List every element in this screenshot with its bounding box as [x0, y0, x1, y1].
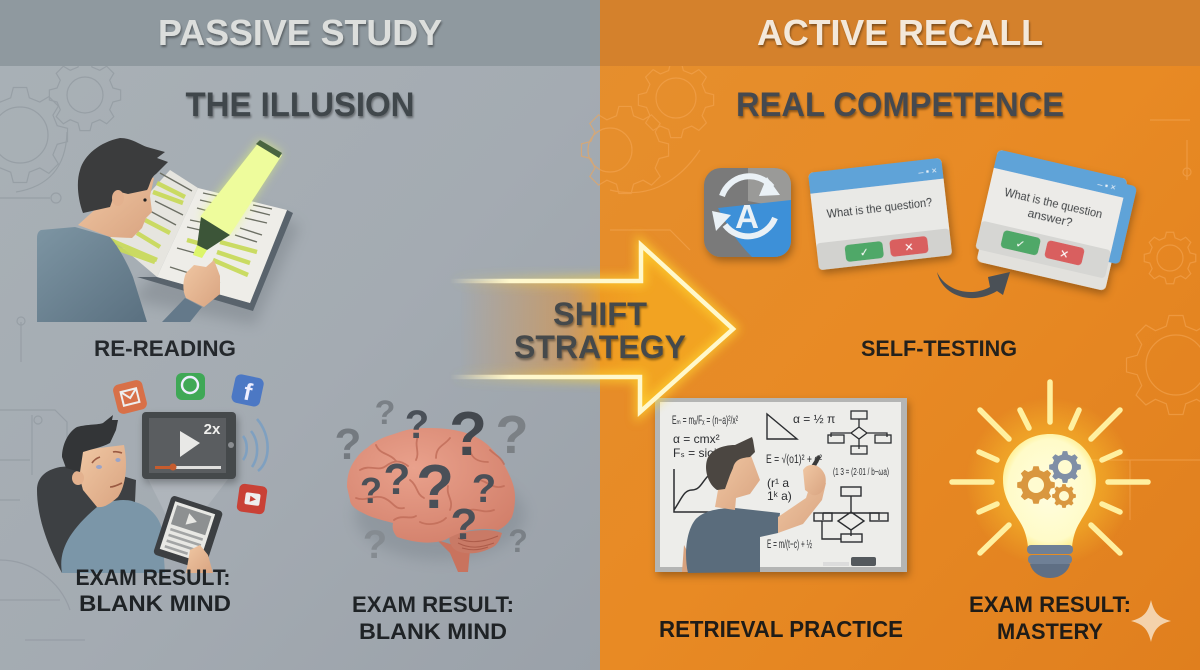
- question marks: ?: [416, 453, 454, 522]
- dialog stack: question answer: answer?: [1026, 206, 1074, 230]
- video tablet: [142, 412, 236, 479]
- e-reader: [153, 495, 223, 571]
- dialog: what is the question: ✕: [904, 241, 914, 254]
- video tablet: 2x: [204, 421, 221, 438]
- flowchart top: [828, 411, 891, 454]
- illustration: distracted student with video and apps: [37, 373, 268, 573]
- dialog stack: question answer: – ▪ ×: [1097, 179, 1117, 193]
- dialog stack: question answer: [972, 149, 1138, 293]
- student hand and marker: [803, 455, 826, 495]
- eraser and marker: [823, 557, 876, 566]
- question marks: ?: [335, 420, 361, 469]
- dialog: what is the question: ✓: [859, 247, 870, 260]
- curved arrow: [937, 272, 1010, 298]
- panel: passive study background: [0, 0, 600, 670]
- sound waves: [243, 419, 268, 471]
- formulas: 1ᵏ a): [767, 489, 792, 503]
- brain folds: [356, 436, 504, 524]
- formulas: E = √(o1)² + o²: [766, 452, 822, 466]
- formulas: Fₛ = sioi²: [673, 446, 720, 460]
- label: exam result blank mind 2: [352, 592, 514, 644]
- flowchart bottom: [814, 487, 888, 542]
- illustration: whiteboard retrieval practice: [655, 398, 907, 573]
- arrow label: SHIFT: [553, 296, 647, 332]
- arrow label: STRATEGY: [514, 329, 686, 365]
- label: exam result mastery: MASTERY: [997, 619, 1103, 644]
- hand: [186, 545, 213, 573]
- highlighter: [193, 140, 282, 258]
- formulas: E = m/(t−c) + ½: [767, 537, 812, 551]
- illustration: student re-reading with highlighter: [37, 138, 300, 325]
- dialog stack: question answer: ✓: [1014, 238, 1026, 252]
- student body: [61, 500, 165, 573]
- book shadow: [130, 200, 300, 325]
- formulas: Eₘ = mₓ/Fₓ = (n−a)²/x²: [672, 413, 738, 427]
- heading: real competence: REAL COMPETENCE: [736, 86, 1064, 124]
- hair: [62, 415, 118, 472]
- question marks: ?: [360, 470, 382, 511]
- bulb glass: [1003, 434, 1096, 547]
- icon: sparkle: [1131, 600, 1171, 642]
- head: [715, 453, 760, 510]
- recall app icon: [704, 168, 791, 257]
- question marks: ?: [384, 455, 410, 504]
- label: exam result mastery: [969, 592, 1131, 644]
- hair: [706, 437, 755, 490]
- illustration: confused brain with question marks: [335, 394, 528, 572]
- hair: [78, 138, 168, 213]
- background pattern: gears and circuits, left: [0, 59, 121, 640]
- light rays: [952, 382, 1148, 553]
- label: re-reading: RE-READING: [94, 336, 236, 361]
- question marks: ?: [472, 467, 496, 511]
- label: retrieval practice: RETRIEVAL PRACTICE: [659, 616, 903, 642]
- app icon: facebook: f: [241, 378, 255, 407]
- question marks: ?: [375, 394, 395, 432]
- label: self-testing: SELF-TESTING: [861, 336, 1017, 361]
- face: [78, 175, 154, 238]
- small graph: [674, 469, 714, 512]
- app icon: gmail: [112, 379, 148, 415]
- label: exam result blank mind 1: [76, 565, 231, 616]
- brain stem: [437, 540, 470, 572]
- label: exam result mastery: EXAM RESULT:: [969, 592, 1131, 617]
- dialog: what is the question: What is the question?: [826, 195, 933, 221]
- whiteboard: [655, 398, 907, 572]
- question marks: ?: [508, 523, 528, 559]
- formulas: α = ½ π: [793, 412, 835, 426]
- gears: [1017, 451, 1081, 508]
- glow: [965, 397, 1135, 567]
- formulas: (1 3 = (2·01 / b−ωa): [833, 467, 889, 478]
- hand: [183, 260, 220, 307]
- bulb base: [1027, 545, 1073, 578]
- head: [79, 445, 126, 507]
- label: exam result blank mind 2: BLANK MIND: [359, 619, 507, 644]
- arrow: shift strategy: [450, 245, 733, 412]
- app icon: youtube: [236, 483, 268, 515]
- background pattern: gears and circuits, right: [581, 62, 1200, 520]
- student body: [686, 508, 780, 573]
- student body: [37, 227, 147, 322]
- student left arm: [682, 545, 698, 572]
- triangle: [767, 414, 797, 439]
- title: passive study: PASSIVE STUDY: [158, 12, 442, 53]
- question marks: ?: [496, 405, 528, 465]
- highlighter glow: [200, 140, 282, 235]
- app icon: facebook: [230, 373, 265, 409]
- panel: active recall background: [600, 0, 1200, 670]
- recall app icon: A: [735, 198, 759, 235]
- formulas: (r¹ a: [767, 476, 789, 490]
- dialog: what is the question: [808, 158, 952, 270]
- arrow label: [514, 296, 686, 365]
- dialog stack: question answer: What is the question: [1003, 185, 1104, 221]
- title: active recall: ACTIVE RECALL: [757, 12, 1043, 53]
- cerebellum: [449, 530, 502, 553]
- open book: [110, 170, 293, 311]
- app icon: whatsapp: [176, 373, 205, 400]
- brain shadow: [355, 470, 525, 560]
- question marks: ?: [451, 500, 477, 549]
- question marks: [335, 394, 528, 567]
- projection beam: [148, 479, 228, 525]
- illustration: glowing lightbulb with gears: [952, 382, 1148, 578]
- face: [96, 458, 121, 469]
- illustration: self-testing app and dialogs: [704, 149, 1138, 298]
- question marks: ?: [449, 400, 487, 469]
- formulas: α = cmx²: [673, 432, 720, 446]
- label: exam result blank mind 2: EXAM RESULT:: [352, 592, 514, 617]
- label: exam result blank mind 1: EXAM RESULT:: [76, 565, 230, 590]
- reclining chair: [37, 465, 136, 573]
- student raised arm: [778, 476, 826, 533]
- question marks: ?: [405, 403, 429, 447]
- dialog: what is the question: – ▪ ×: [918, 165, 937, 177]
- formulas: [672, 412, 889, 551]
- brain: [347, 428, 515, 543]
- label: exam result blank mind 1: BLANK MIND: [79, 591, 231, 616]
- heading: the illusion: THE ILLUSION: [186, 86, 414, 124]
- question marks: ?: [363, 523, 387, 567]
- dialog stack: question answer: ✕: [1058, 248, 1070, 262]
